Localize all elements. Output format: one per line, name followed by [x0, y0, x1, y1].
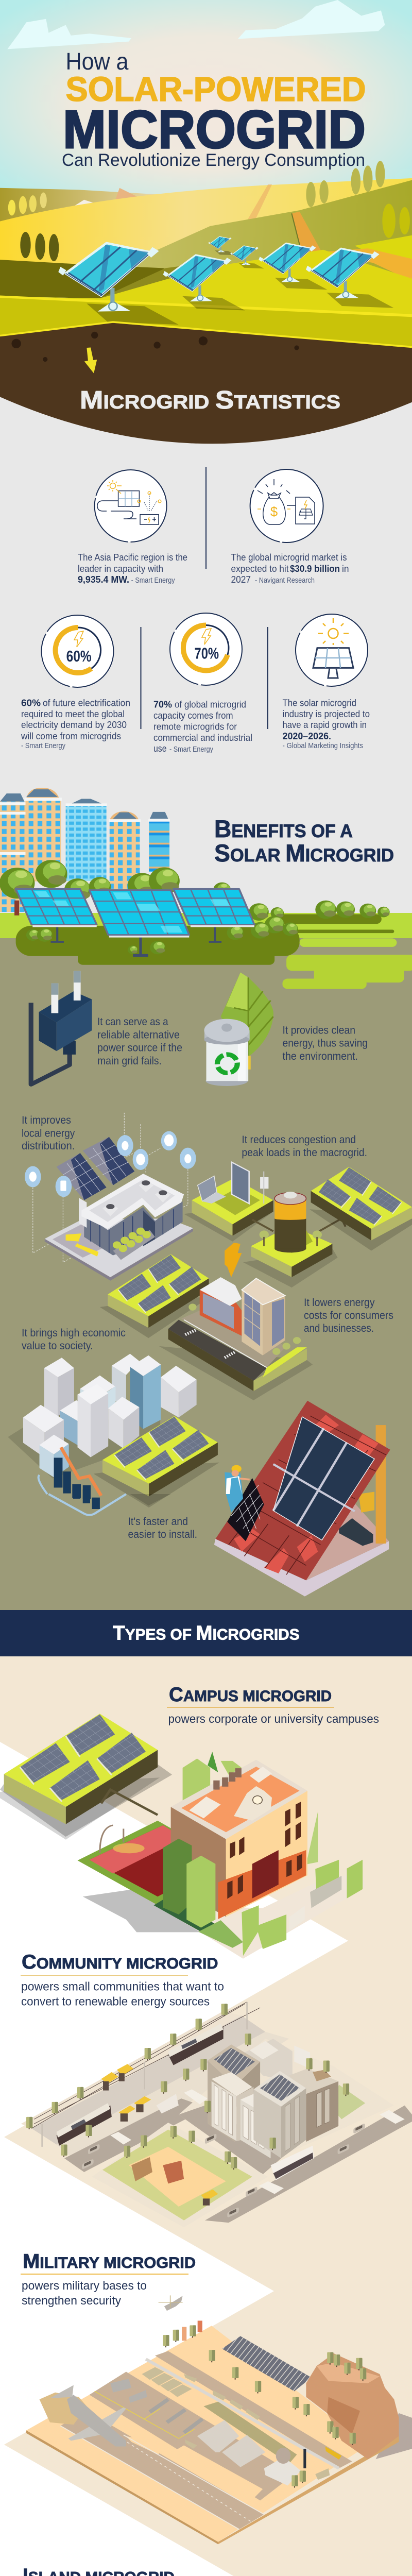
- stat text: - Smart Energy: [21, 742, 66, 750]
- icon: 60 percent ring: [41, 615, 113, 687]
- panel: military microgrid: [21, 2250, 412, 2544]
- benefit text: It's faster and: [128, 1516, 188, 1528]
- divider: [267, 627, 268, 729]
- heading: benefits: BENEFITS OF A: [214, 815, 353, 842]
- benefit text: [282, 1025, 368, 1062]
- benefit text: main grid fails.: [97, 1055, 162, 1067]
- description: powers small communities that want to: [21, 1979, 224, 1993]
- description: powers military bases to: [22, 2279, 147, 2292]
- benefit text: distribution.: [22, 1140, 75, 1152]
- illustration: military base with aircraft: [26, 2320, 412, 2544]
- stat text: [231, 552, 349, 585]
- stat text: commercial and industrial: [153, 733, 252, 743]
- stat text: of future electrification: [43, 698, 130, 708]
- icon: money bag and document: $: [270, 504, 278, 519]
- benefit text: value to society.: [22, 1340, 93, 1352]
- benefit text: peak loads in the macrogrid.: [242, 1147, 367, 1159]
- stat text: 60%: [21, 698, 41, 708]
- icon: 60 percent ring: 60%: [66, 647, 92, 665]
- stat text: [78, 552, 187, 585]
- heading: benefits: SOLAR MICROGRID: [214, 839, 394, 867]
- underline: [167, 1707, 334, 1708]
- illustration: campus with panels and school building: [0, 1714, 365, 1959]
- benefit text: It can serve as a: [97, 1016, 168, 1028]
- heading: campus: CAMPUS MICROGRID: [169, 1684, 332, 1706]
- benefit text: It provides clean: [282, 1025, 355, 1037]
- illustration: smart building with rooftop solar: [25, 1113, 196, 1281]
- worker figure: [226, 1465, 250, 1494]
- divider: [140, 627, 141, 729]
- benefit: local distribution: [22, 1113, 196, 1281]
- benefit text: It improves: [22, 1114, 71, 1126]
- divider: [205, 467, 207, 569]
- stat text: [21, 698, 130, 750]
- benefit text: the environment.: [282, 1050, 358, 1062]
- stat text: industry is projected to: [282, 709, 370, 719]
- panel: community microgrid: [21, 1951, 412, 2227]
- illustration: city blocks with rising chart: [8, 1354, 219, 1507]
- description: strengthen security: [22, 2294, 121, 2307]
- benefit: reduces congestion: [184, 1134, 412, 1287]
- benefit text: [242, 1134, 367, 1159]
- hero sky: [0, 0, 412, 206]
- icon: leaf and recycling bin: [204, 972, 273, 1086]
- benefit: clean energy: [204, 972, 368, 1086]
- benefit text: It lowers energy: [304, 1297, 375, 1309]
- stat: Asia Pacific capacity: [78, 470, 187, 585]
- benefit text: local energy: [22, 1128, 75, 1140]
- stat text: in: [342, 564, 349, 574]
- panel: microgrid statistics: [21, 467, 370, 754]
- stat text: The Asia Pacific region is the: [78, 552, 187, 563]
- stat text: will come from microgrids: [21, 731, 121, 741]
- icon: helicopter: [159, 2295, 183, 2311]
- illustration: worker installing rooftop panels: [48, 1401, 390, 1597]
- description: powers corporate or university campuses: [168, 1712, 379, 1725]
- stat text: 70%: [153, 700, 172, 710]
- stat text: [282, 698, 370, 750]
- stat: global market: [231, 469, 349, 585]
- panel: benefits of a solar microgrid: [0, 788, 412, 1597]
- stat text: - Smart Energy: [169, 745, 214, 754]
- benefit text: costs for consumers: [304, 1310, 393, 1321]
- icon: 70 percent ring: 70%: [195, 645, 219, 663]
- heading: benefits: [214, 815, 394, 867]
- stat text: 2027: [231, 574, 251, 585]
- heading band: types of microgrids: [0, 1610, 412, 1656]
- illustration: street with office buildings: [100, 1254, 313, 1400]
- benefit: backup power: [31, 971, 182, 1084]
- stat text: - Global Marketing Insights: [282, 742, 363, 750]
- stat text: electricity demand by 2030: [21, 720, 127, 730]
- title: MICROGRID: [63, 100, 366, 160]
- title: Can Revolutionize Energy Consumption: [62, 150, 365, 170]
- description: convert to renewable energy sources: [21, 1994, 210, 2008]
- stat text: 2020–2026.: [282, 731, 331, 741]
- icon: money bag and document: [250, 469, 323, 543]
- benefit text: [97, 1016, 182, 1067]
- title: How a: [66, 48, 129, 75]
- stat text: 9,935.4 MW.: [78, 574, 129, 585]
- benefit text: power source if the: [97, 1042, 182, 1054]
- benefit: economic value: [8, 1327, 219, 1507]
- benefit text: [22, 1327, 126, 1352]
- stat text: capacity comes from: [153, 710, 233, 721]
- stat text: The global microgrid market is: [231, 552, 347, 563]
- benefit text: [128, 1516, 197, 1540]
- icon: sun and solar panel: [296, 614, 368, 686]
- stat: 60 percent: [21, 615, 130, 750]
- illustration: battery connected to devices and panels: [184, 1162, 412, 1287]
- stat text: expected to hit: [231, 564, 288, 574]
- benefit text: and businesses.: [304, 1323, 374, 1334]
- stat text: use: [153, 743, 167, 754]
- stat text: $30.9 billion: [290, 564, 340, 574]
- description: [22, 2279, 147, 2307]
- icon: down arrow: [84, 347, 97, 373]
- benefit: lowers costs: [100, 1254, 393, 1400]
- benefit: faster install: [48, 1401, 390, 1597]
- stat text: - Smart Energy: [131, 577, 175, 585]
- underline: [21, 2274, 188, 2275]
- hero landscape illustration: [0, 0, 412, 444]
- heading: community: COMMUNITY MICROGRID: [22, 1951, 218, 1973]
- stat text: The solar microgrid: [282, 698, 356, 708]
- stat text: of global microgrid: [175, 700, 246, 710]
- benefit text: [304, 1297, 393, 1334]
- icon: plug: [31, 971, 92, 1084]
- stat: 70 percent: [153, 613, 252, 754]
- description: [21, 1979, 224, 2008]
- stat text: required to meet the global: [21, 709, 125, 719]
- illustration: city block with trams and playground: [21, 2002, 412, 2227]
- panel: campus microgrid: [0, 1684, 379, 1959]
- illustration: city skyline with solar panels: [0, 788, 412, 989]
- stat text: [153, 700, 252, 754]
- heading band: types of microgrids: TYPES OF MICROGRIDS: [113, 1622, 300, 1645]
- title: SOLAR-POWERED: [66, 70, 366, 109]
- benefit text: It brings high economic: [22, 1327, 126, 1339]
- benefit text: It reduces congestion and: [242, 1134, 356, 1146]
- stat text: have a rapid growth in: [282, 720, 367, 730]
- icon: 70 percent ring: [170, 613, 242, 685]
- benefit text: [22, 1114, 75, 1152]
- icon: solar panel to battery: [95, 470, 167, 542]
- stat: rapid growth: [282, 614, 370, 750]
- benefit text: reliable alternative: [97, 1029, 180, 1041]
- benefit text: energy, thus saving: [282, 1038, 368, 1049]
- panel: hero: [0, 0, 412, 444]
- benefit text: easier to install.: [128, 1529, 197, 1540]
- heading: military: MILITARY MICROGRID: [23, 2250, 196, 2273]
- stat text: - Navigant Research: [255, 577, 315, 585]
- stat text: remote microgrids for: [153, 721, 237, 732]
- heading: microgrid statistics: MICROGRID STATISTICS: [80, 386, 340, 414]
- stat text: leader in capacity with: [78, 564, 163, 574]
- title: [62, 48, 366, 170]
